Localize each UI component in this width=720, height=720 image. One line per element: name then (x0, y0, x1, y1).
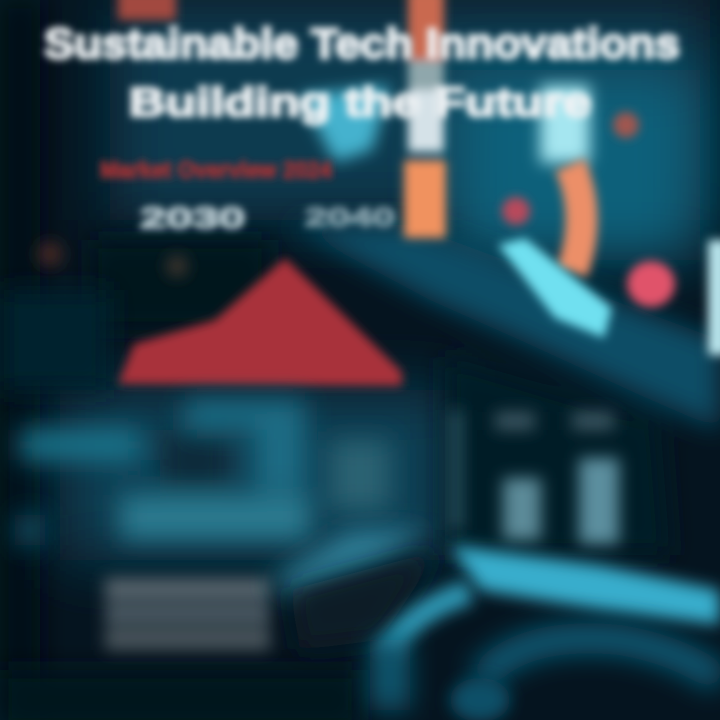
title: Sustainable Tech Innovations (44, 20, 680, 68)
red area chart (118, 258, 402, 386)
stat labels: 2030 (140, 202, 245, 235)
panel: grey text block (105, 578, 270, 650)
title (44, 20, 680, 125)
stat labels (140, 202, 395, 235)
subtitle: Market Overview 2024 (100, 157, 333, 184)
decoration: top red block (118, 0, 176, 20)
decoration: orange vertical tube (404, 0, 446, 238)
small icons (38, 242, 187, 276)
stat labels: 2040 (305, 202, 395, 232)
decoration: pale cyan tube and orange curve (498, 85, 720, 355)
wave: bottom right cyan (270, 530, 720, 720)
chart labels: left teal (15, 400, 390, 545)
panel: diagonal teal band (290, 225, 720, 555)
title: Building the Future (129, 79, 591, 125)
decoration: cyan funnel (300, 85, 390, 162)
bar chart (450, 410, 619, 544)
